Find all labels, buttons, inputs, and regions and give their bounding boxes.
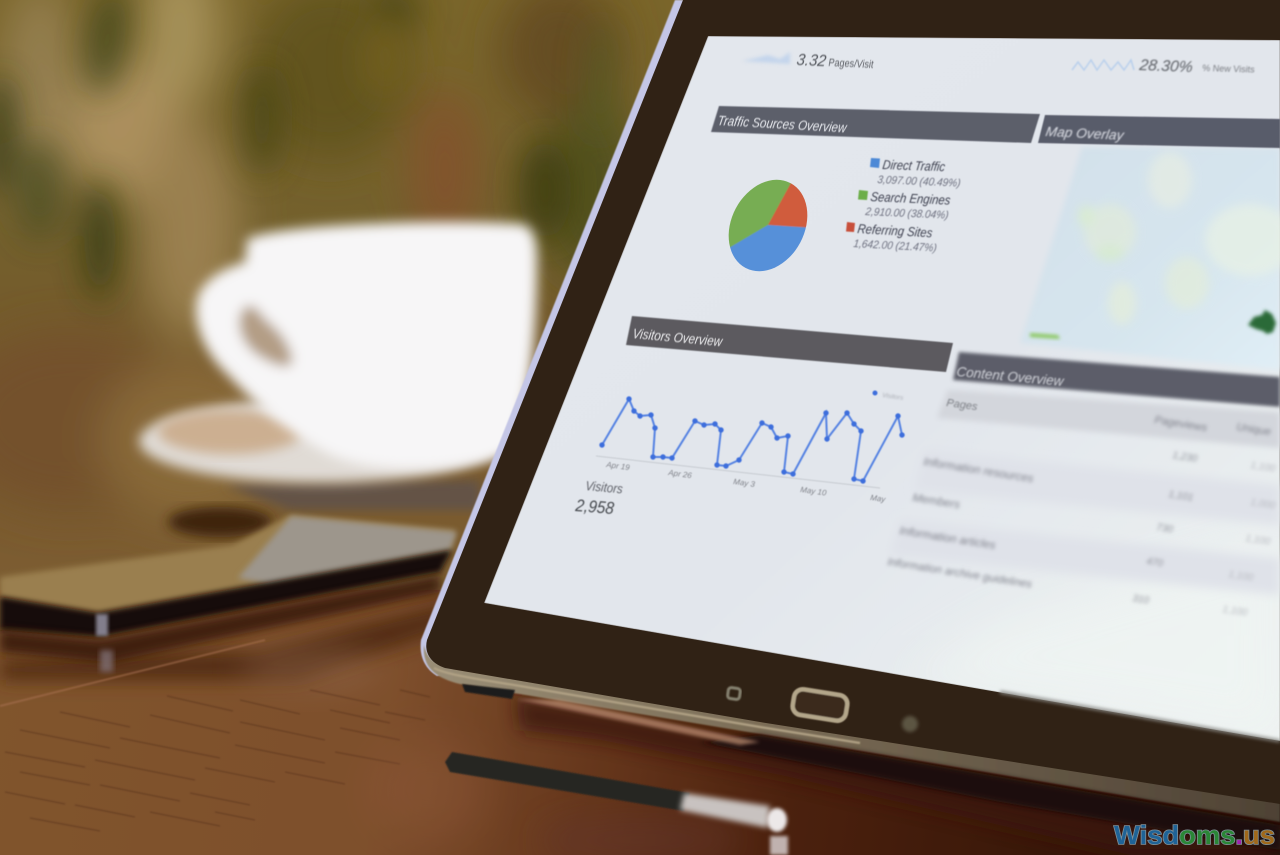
saucer underside shadow bbox=[225, 480, 480, 510]
pie legend: Direct Traffic bbox=[882, 157, 946, 174]
panel: top stats: 3.32 bbox=[795, 52, 828, 70]
visitors metric: 2,958 bbox=[574, 496, 615, 518]
pie legend: 1,642.00 (21.47%) bbox=[853, 238, 938, 255]
visitors metric bbox=[574, 480, 624, 515]
table plank seam bbox=[0, 640, 265, 706]
content table rows: 1,230 bbox=[1172, 450, 1198, 465]
chart axis labels: Visitors bbox=[882, 392, 904, 402]
panel: top stats: Pages/Visit bbox=[827, 57, 875, 71]
content table rows: 1,101 bbox=[1168, 489, 1194, 504]
pie legend: Referring Sites bbox=[857, 221, 933, 240]
content table rows: 1,100 bbox=[1222, 604, 1248, 619]
panel: map overlay header: Map Overlay bbox=[1044, 123, 1126, 143]
silver side edge bbox=[421, 0, 690, 676]
panel: traffic sources overview: Traffic Sources Overview bbox=[716, 113, 848, 136]
panel: content overview: Content Overview bbox=[956, 363, 1066, 389]
icon: recent button bbox=[902, 716, 918, 732]
pie chart bbox=[728, 180, 808, 272]
panel: top stats: 28.30% bbox=[1138, 57, 1194, 76]
icon: home button bbox=[791, 688, 849, 722]
content table rows: Unique bbox=[1236, 421, 1272, 438]
screen bbox=[484, 36, 1280, 741]
icon: Australia on map bbox=[1248, 310, 1276, 334]
content table row bands bbox=[1006, 474, 1280, 596]
phone shadow bbox=[168, 507, 272, 537]
content table rows: Information archive guidelines bbox=[887, 556, 1033, 591]
bottom metal rim bbox=[424, 645, 1280, 822]
pie legend: Search Engines bbox=[870, 189, 951, 208]
chart axis labels bbox=[605, 392, 904, 504]
tablet shadow on table bbox=[515, 695, 1280, 855]
content table rows bbox=[887, 414, 1276, 619]
tablet bezel bbox=[426, 0, 1280, 804]
chart axis labels: May 10 bbox=[800, 485, 827, 498]
icon: coffee saucer bbox=[139, 399, 501, 483]
wooden table bbox=[0, 590, 1280, 855]
panel: content overview: Pages bbox=[946, 397, 979, 413]
content table rows: 1,000 bbox=[1250, 497, 1276, 512]
content table rows: 310 bbox=[1132, 593, 1150, 607]
chart axis labels: May bbox=[870, 493, 887, 504]
map panel bbox=[1020, 147, 1280, 370]
blurred background foliage bbox=[0, 0, 1280, 660]
blurred bottom edge of screen bbox=[1000, 692, 1280, 741]
chart axis labels: Apr 19 bbox=[605, 460, 631, 472]
content table rows: 470 bbox=[1146, 556, 1164, 570]
pie legend: 2,910.00 (38.04%) bbox=[864, 206, 949, 222]
panel: traffic sources overview bbox=[710, 105, 1040, 272]
pie legend: 3,097.00 (40.49%) bbox=[877, 174, 961, 190]
pie legend bbox=[846, 157, 961, 255]
panel: visitors overview: Visitors Overview bbox=[631, 325, 724, 350]
content table rows: Pageviews bbox=[1154, 414, 1208, 434]
tablet foot bbox=[462, 684, 515, 699]
content table rows: Information resources bbox=[923, 456, 1035, 485]
panel: top stats bbox=[746, 52, 1255, 74]
map island bbox=[1030, 333, 1060, 339]
watermark: Wisdoms.us: Wisdoms.us bbox=[1114, 820, 1275, 850]
panel: content overview bbox=[887, 352, 1280, 619]
panel: visitors overview bbox=[574, 316, 953, 518]
panel: map overlay header bbox=[1038, 115, 1280, 148]
visitors metric: Visitors bbox=[585, 478, 624, 497]
content table rows: 1,100 bbox=[1228, 569, 1254, 584]
icon: smartphone bbox=[0, 515, 457, 672]
icon: coffee cup bbox=[196, 222, 537, 469]
content table rows: Members bbox=[912, 492, 961, 511]
chart axis labels: Apr 26 bbox=[667, 468, 693, 480]
tablet bbox=[421, 0, 1280, 855]
icon: back button bbox=[727, 687, 741, 700]
line chart bbox=[596, 390, 905, 488]
content table rows: Information articles bbox=[899, 525, 997, 552]
reflection under tablet bbox=[516, 699, 760, 745]
content table rows: 1,100 bbox=[1245, 533, 1271, 548]
panel: top stats: % New Visits bbox=[1202, 63, 1256, 75]
content table rows: 1,100 bbox=[1250, 460, 1276, 475]
content table rows: 730 bbox=[1156, 522, 1174, 536]
icon: stylus pen bbox=[445, 752, 788, 855]
chart axis labels: May 3 bbox=[733, 477, 756, 489]
